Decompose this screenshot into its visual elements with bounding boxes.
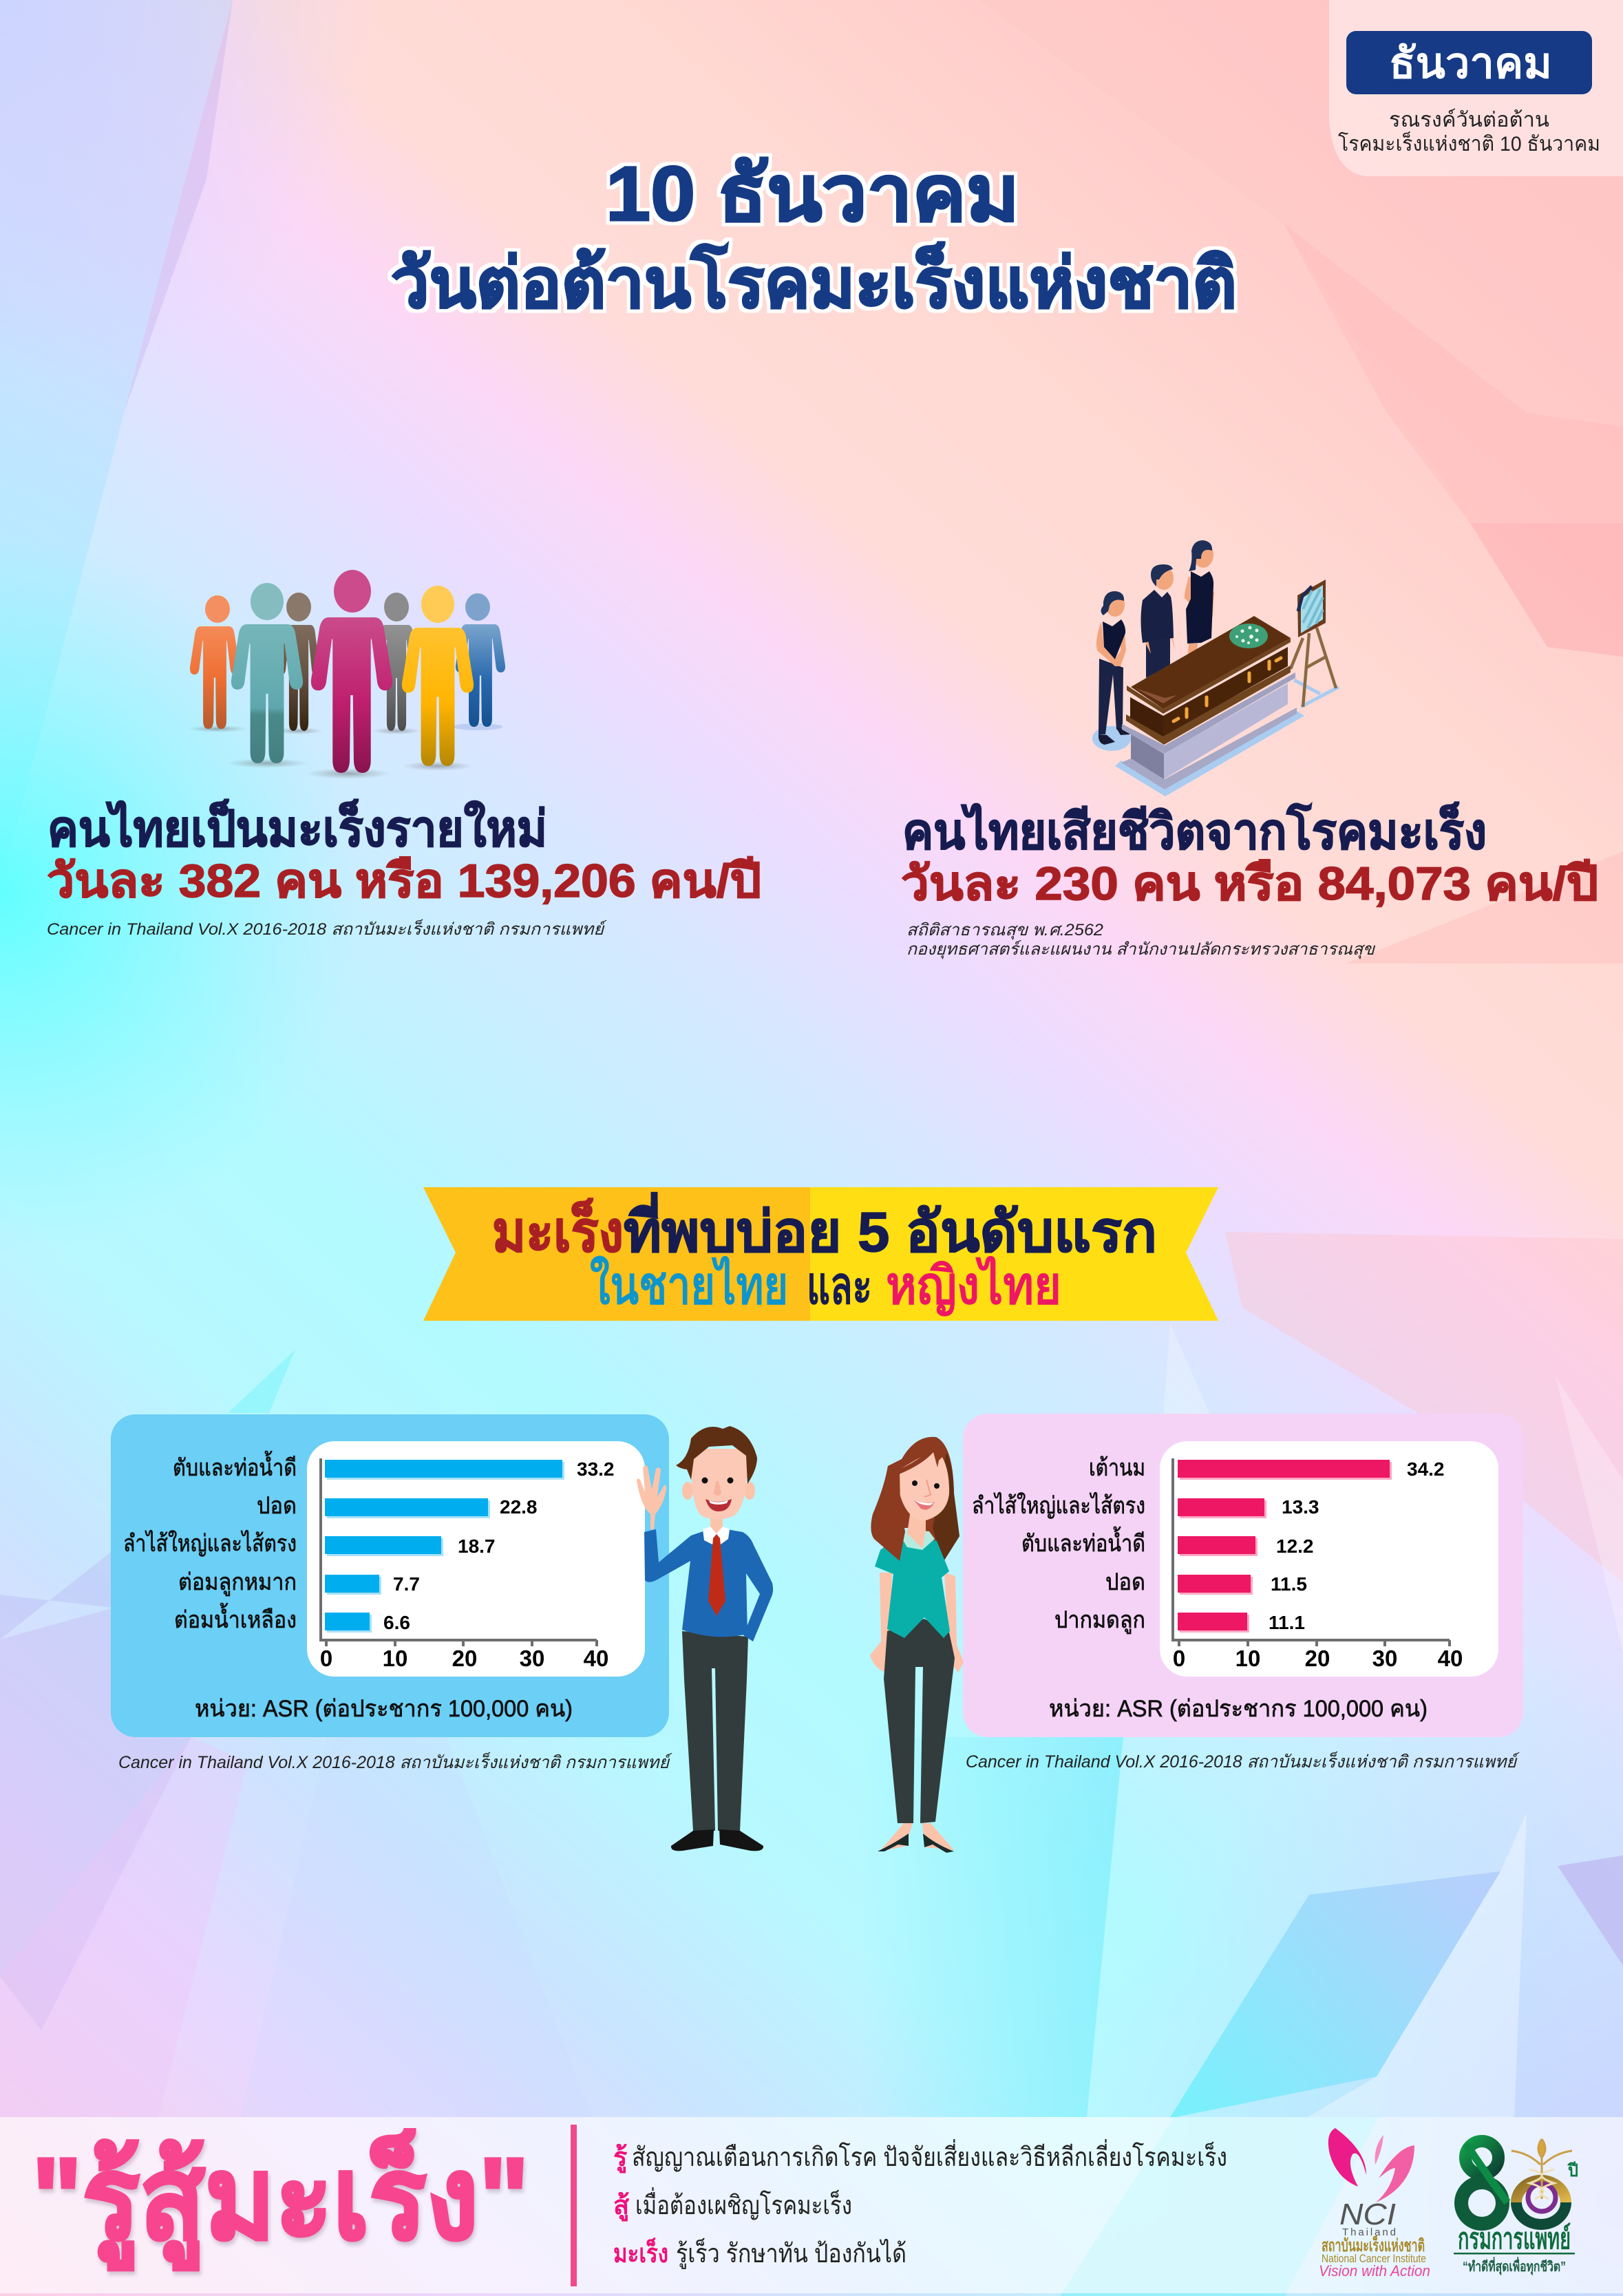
campaign text: รณรงค์วันต่อต้าน (1389, 108, 1549, 131)
values: 11.5 (1271, 1573, 1307, 1595)
mourners (1092, 540, 1214, 751)
values: 18.7 (458, 1535, 496, 1557)
tab panel (1329, 0, 1623, 176)
number eight (1461, 2141, 1507, 2224)
head (899, 1443, 949, 1520)
handles (1174, 658, 1281, 721)
woman front (1096, 591, 1130, 745)
axis labels: 30 (1372, 1646, 1397, 1671)
axis labels: 40 (584, 1646, 608, 1671)
title: 10 ธันวาคม (606, 151, 1019, 237)
collar (902, 1529, 935, 1550)
axis labels: 20 (1305, 1646, 1330, 1671)
axis labels (1173, 1646, 1463, 1671)
flowers (1229, 624, 1268, 648)
figures: วันละ 230 คน หรือ 84,073 คน/ปี (901, 858, 1598, 910)
category labels: ต่อมน้ำเหลือง (174, 1603, 297, 1633)
figures: วันละ 382 คน หรือ 139,206 คน/ปี (47, 855, 761, 907)
institute thai: สถาบันมะเร็งแห่งชาติ (1322, 2235, 1425, 2255)
heading: คนไทยเสียชีวิตจากโรคมะเร็ง (902, 802, 1487, 860)
category labels: เต้านม (1089, 1455, 1145, 1481)
line one: สัญญาณเตือนการเกิดโรค ปัจจัยเสี่ยงและวิธีหลีกเลี่ยงโรคมะเร็ง (632, 2139, 1227, 2172)
values: 7.7 (393, 1573, 420, 1595)
axis labels: 0 (320, 1646, 332, 1671)
banner line two: ในชายไทย (590, 1255, 788, 1315)
stat: new cases (47, 799, 761, 939)
ribbon right half (810, 1187, 1218, 1321)
values: 33.2 (577, 1458, 614, 1480)
motto: “ทำดีที่สุดเพื่อทุกชีวิต” (1463, 2256, 1566, 2275)
bars (1178, 1460, 1392, 1633)
values (1269, 1458, 1444, 1633)
tie (708, 1534, 725, 1616)
source: women chart: Cancer in Thailand Vol.X 2016-2018 สถาบันมะเร็งแห่งชาติ กรมการแพทย์ (966, 1751, 1520, 1772)
institute english: National Cancer Institute (1322, 2252, 1426, 2265)
collar (703, 1527, 730, 1544)
logo: national cancer institute (1319, 2128, 1430, 2279)
axes (321, 1458, 597, 1646)
axis labels: 10 (383, 1646, 407, 1671)
unit note: หน่วย: ASR (ต่อประชากร 100,000 คน) (1049, 1696, 1428, 1722)
values: 13.3 (1282, 1496, 1319, 1518)
woman back (1185, 540, 1214, 657)
logo: department of medical services (1454, 2139, 1578, 2275)
values: 22.8 (500, 1496, 537, 1518)
shoes (671, 1829, 763, 1851)
category labels: ต่อมลูกหมาก (178, 1569, 297, 1596)
hand (637, 1465, 666, 1529)
category labels: ปากมดลูก (1054, 1607, 1145, 1634)
year mark: ปี (1567, 2161, 1578, 2180)
source: กองยุทธศาสตร์และแผนงาน สำนักงานปลัดกระทรวงสาธารณสุข (906, 939, 1376, 959)
values (383, 1458, 614, 1633)
line three: มะเร็ง (613, 2237, 668, 2268)
feet (880, 1823, 954, 1851)
values: 34.2 (1407, 1458, 1444, 1480)
panel: men chart (111, 1414, 669, 1737)
month tab (1329, 0, 1623, 176)
shoes (878, 1833, 954, 1853)
category labels: ตับและท่อน้ำดี (1021, 1527, 1145, 1557)
category labels: ปอด (1105, 1569, 1145, 1595)
line two: สู้ (613, 2191, 630, 2222)
rule (1454, 2253, 1575, 2255)
slogan: "รู้สู้มะเร็ง" (32, 2129, 529, 2271)
axis labels: 40 (1438, 1646, 1463, 1671)
banner line two: หญิงไทย (886, 1255, 1061, 1317)
chart: men bar chart (307, 1441, 645, 1677)
neck (907, 1514, 926, 1549)
source: สถิติสาธารณสุข พ.ศ.2562 (906, 921, 1103, 940)
band (0, 2117, 1623, 2293)
source (906, 921, 1376, 959)
bars (325, 1460, 564, 1633)
icon: group of people (187, 570, 505, 779)
category labels (972, 1455, 1145, 1634)
ribbon left half (423, 1187, 810, 1321)
pants (884, 1619, 955, 1823)
icon: funeral with coffin (1092, 540, 1339, 796)
shirt (875, 1532, 950, 1638)
hair back (871, 1437, 959, 1562)
vision tagline: Vision with Action (1319, 2262, 1430, 2279)
sweater (644, 1529, 773, 1641)
head (676, 1426, 757, 1520)
month badge text: ธันวาคม (1389, 40, 1552, 87)
banner line one: มะเร็ง (492, 1198, 624, 1264)
banner line one (492, 1192, 1157, 1264)
pants (682, 1631, 748, 1831)
axes (1173, 1458, 1450, 1646)
heading: คนไทยเป็นมะเร็งรายใหม่ (47, 799, 547, 857)
unit note: หน่วย: ASR (ต่อประชากร 100,000 คน) (195, 1696, 573, 1722)
title: วันต่อต้านโรคมะเร็งแห่งชาติ (391, 242, 1237, 322)
neck (710, 1518, 723, 1537)
character: woman (870, 1437, 964, 1853)
category labels: ลำไส้ใหญ่และไส้ตรง (972, 1492, 1145, 1519)
line three: รู้เร็ว รักษาทัน ป้องกันได้ (676, 2237, 906, 2269)
line one: รู้ (613, 2143, 628, 2173)
campaign text: โรคมะเร็งแห่งชาติ 10 ธันวาคม (1338, 131, 1600, 156)
character: man waving (637, 1426, 773, 1851)
number zero (1516, 2180, 1566, 2224)
title (391, 151, 1237, 322)
butterfly (1328, 2128, 1414, 2202)
source: men chart: Cancer in Thailand Vol.X 2016-2018 สถาบันมะเร็งแห่งชาติ กรมการแพทย์ (118, 1752, 672, 1772)
hair front (871, 1466, 905, 1561)
axis labels: 30 (520, 1646, 544, 1671)
axis labels: 0 (1173, 1646, 1185, 1671)
campaign text (1338, 108, 1600, 156)
axis labels: 10 (1235, 1646, 1260, 1671)
banner line two: และ (807, 1257, 872, 1315)
script mark: NCI (1339, 2198, 1396, 2231)
category labels: ลำไส้ใหญ่และไส้ตรง (123, 1530, 297, 1557)
arms (870, 1573, 964, 1679)
caduceus (1511, 2139, 1572, 2199)
category labels: ปอด (257, 1493, 297, 1519)
banner line two (590, 1255, 1061, 1317)
panel: women chart (963, 1414, 1523, 1737)
category labels (123, 1451, 297, 1633)
line three (613, 2237, 906, 2269)
divider (571, 2125, 577, 2286)
axis labels: 20 (452, 1646, 477, 1671)
easel (1291, 580, 1339, 707)
values: 12.2 (1276, 1535, 1313, 1557)
category labels: ตับและท่อน้ำดี (173, 1451, 297, 1481)
values: 6.6 (383, 1612, 410, 1633)
month badge (1346, 31, 1592, 94)
axis labels (320, 1646, 608, 1671)
ribbon banner (423, 1187, 1218, 1321)
source: Cancer in Thailand Vol.X 2016-2018 สถาบันมะเร็งแห่งชาติ กรมการแพทย์ (47, 919, 607, 939)
line two (613, 2187, 852, 2222)
banner line one: ที่พบบ่อย 5 อันดับแรก (624, 1192, 1157, 1264)
stat: deaths (901, 802, 1598, 959)
footer band (0, 2117, 1623, 2293)
man back (1141, 564, 1176, 678)
line two: เมื่อต้องเผชิญโรคมะเร็ง (635, 2187, 852, 2220)
values: 11.1 (1269, 1612, 1305, 1633)
coffin on pedestal (1115, 616, 1304, 796)
thailand: Thailand (1342, 2226, 1396, 2238)
chart: women bar chart (1160, 1441, 1498, 1677)
